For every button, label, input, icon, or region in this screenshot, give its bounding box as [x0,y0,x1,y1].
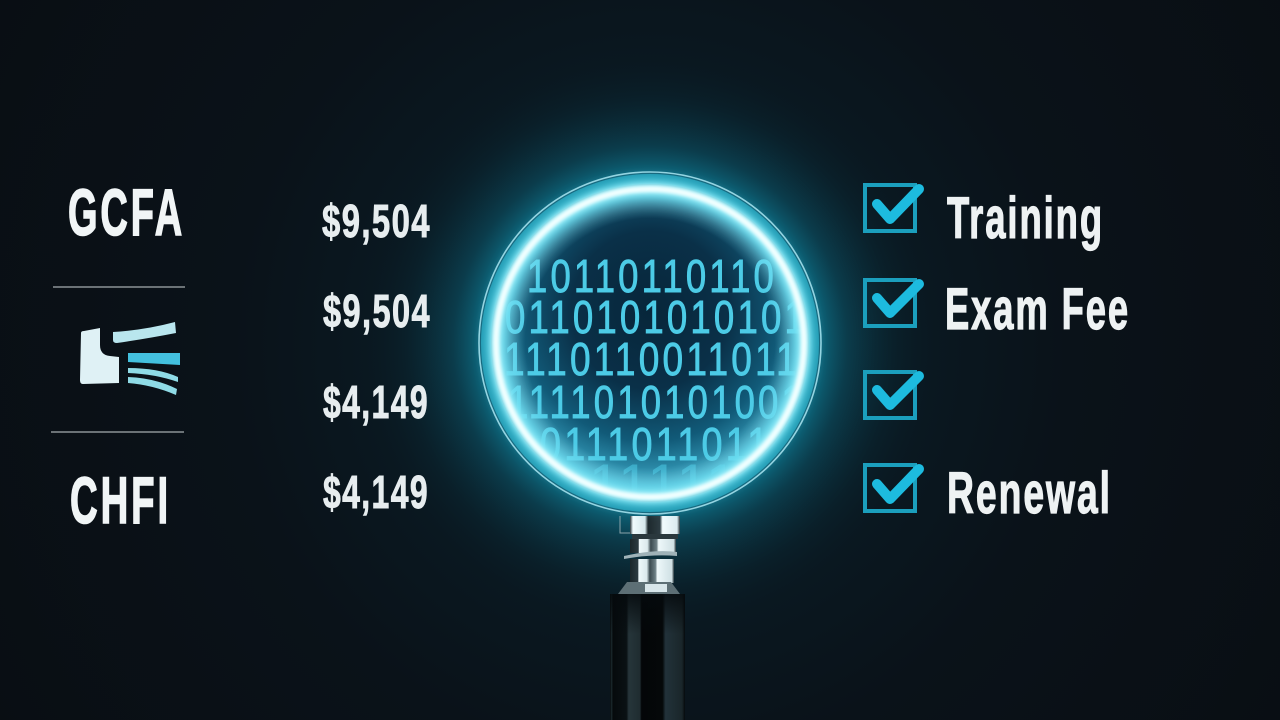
price: CHFI training: $4,149 [323,376,429,428]
magnifying glass [406,99,894,720]
checkbox: exam fee [865,280,919,326]
lens body [479,172,821,514]
checkbox: training [865,185,919,231]
price: CHFI exam: $4,149 [323,466,429,518]
label: Exam Fee: Exam Fee [945,277,1130,342]
binary digits: 11111 [590,455,740,507]
checkbox: renewal [865,465,919,511]
price column [322,195,431,518]
price: GCFA training: $9,504 [322,195,431,247]
label: GCFA: GCFA [68,175,185,249]
binary digits: 1110110011011 [504,333,800,385]
binary digits: 1111010101001 [508,376,805,428]
label: Renewal: Renewal [947,461,1112,526]
label: CHFI: CHFI [70,463,171,537]
lens glow [360,53,940,633]
icon: abstract logo [80,322,180,395]
glowing ring [496,189,804,497]
binary digits: 10110110110 [527,250,777,302]
left column: certifications [51,175,185,537]
binary digits: 0110101010101 [505,291,808,343]
checkbox: blank item [865,372,919,418]
magnifier handle [610,516,685,720]
binary digits: 01110110111 [540,418,793,470]
binary digits [506,259,797,484]
label: Training: Training [947,186,1104,251]
price: GCFA exam: $9,504 [323,285,431,337]
checklist [865,185,1130,526]
